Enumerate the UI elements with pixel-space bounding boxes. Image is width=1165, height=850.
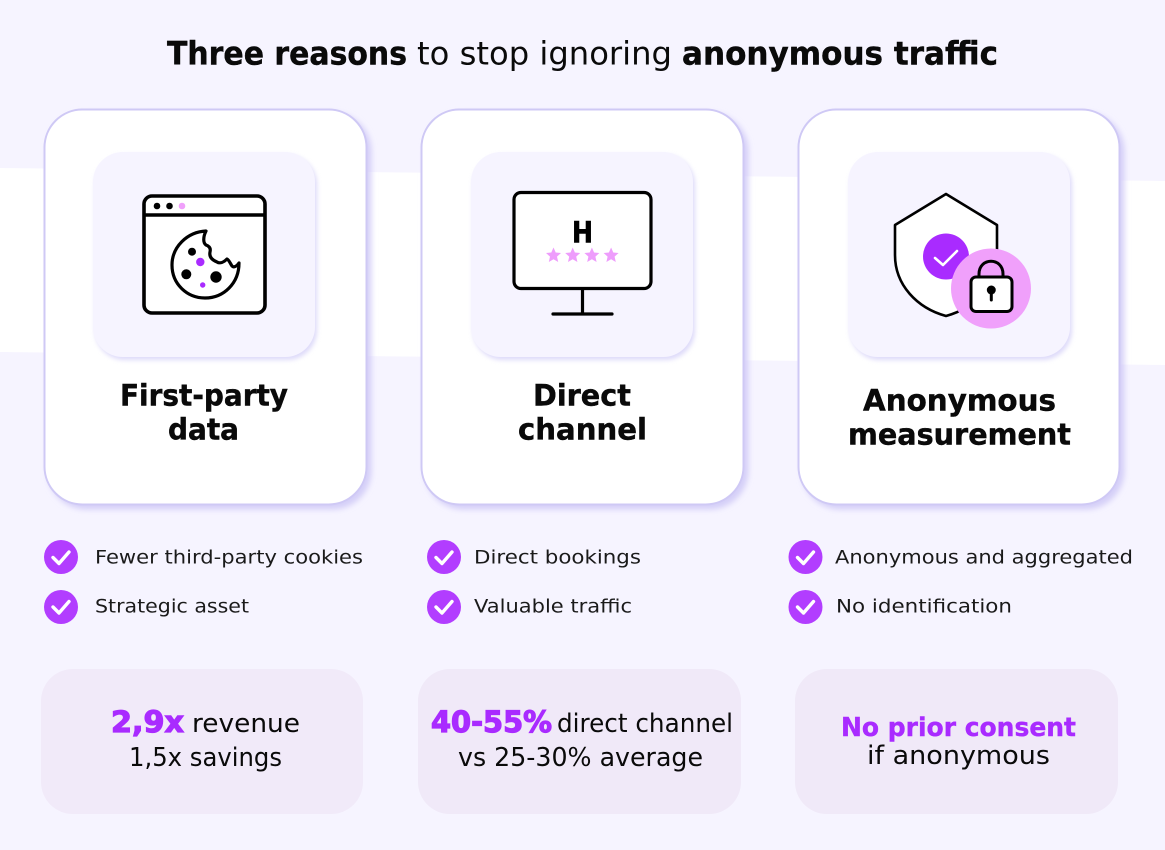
stat: direct channel share: direct channel xyxy=(557,709,733,739)
title: Three reasons xyxy=(167,34,407,72)
icon: monitor with hotel rating: H xyxy=(572,215,593,249)
panel: direct channel xyxy=(422,110,744,504)
stat: no prior consent: No prior consent xyxy=(841,713,1076,743)
title xyxy=(167,34,998,72)
checklist: anonymous measurement xyxy=(788,540,1133,624)
heading: direct channel: channel xyxy=(518,412,647,446)
heading: first-party data: data xyxy=(168,412,239,446)
heading: anonymous measurement: measurement xyxy=(848,418,1071,452)
checklist: direct channel: Valuable traffic xyxy=(474,596,632,618)
heading: first-party data xyxy=(120,378,288,446)
checklist: anonymous measurement: Anonymous and aggregated xyxy=(835,546,1133,568)
icon: monitor with hotel rating xyxy=(514,192,651,314)
heading: direct channel xyxy=(518,378,647,446)
checklist: first-party data: Fewer third-party cookies xyxy=(95,546,363,568)
title: to stop ignoring xyxy=(417,34,672,72)
stat: direct channel share: 40-55% xyxy=(431,705,552,739)
heading: first-party data: First-party xyxy=(120,378,288,412)
stat: direct channel share: vs 25-30% average xyxy=(458,743,703,773)
stat: direct channel share xyxy=(418,669,741,814)
stat: no prior consent: if anonymous xyxy=(867,741,1050,771)
checklist: anonymous measurement: No identification xyxy=(836,596,1012,618)
stat: revenue and savings xyxy=(41,669,363,814)
checklist: first-party data xyxy=(44,540,363,624)
heading: direct channel: Direct xyxy=(533,378,631,412)
checklist: direct channel xyxy=(427,540,641,624)
stat: revenue and savings: 2,9x xyxy=(111,705,184,739)
panel: anonymous measurement xyxy=(798,110,1120,504)
stat: revenue and savings: 1,5x savings xyxy=(129,743,282,773)
stat: revenue and savings: revenue xyxy=(192,709,300,739)
heading: anonymous measurement: Anonymous xyxy=(863,384,1056,418)
icon: browser window with cookie xyxy=(144,196,265,313)
stat: no prior consent xyxy=(795,669,1118,814)
checklist: first-party data: Strategic asset xyxy=(95,596,249,618)
title: anonymous traffic xyxy=(682,34,998,72)
heading: anonymous measurement xyxy=(848,384,1071,452)
panel: first-party data xyxy=(44,110,366,504)
checklist: direct channel: Direct bookings xyxy=(474,546,641,568)
icon: shield and padlock xyxy=(895,194,1031,328)
